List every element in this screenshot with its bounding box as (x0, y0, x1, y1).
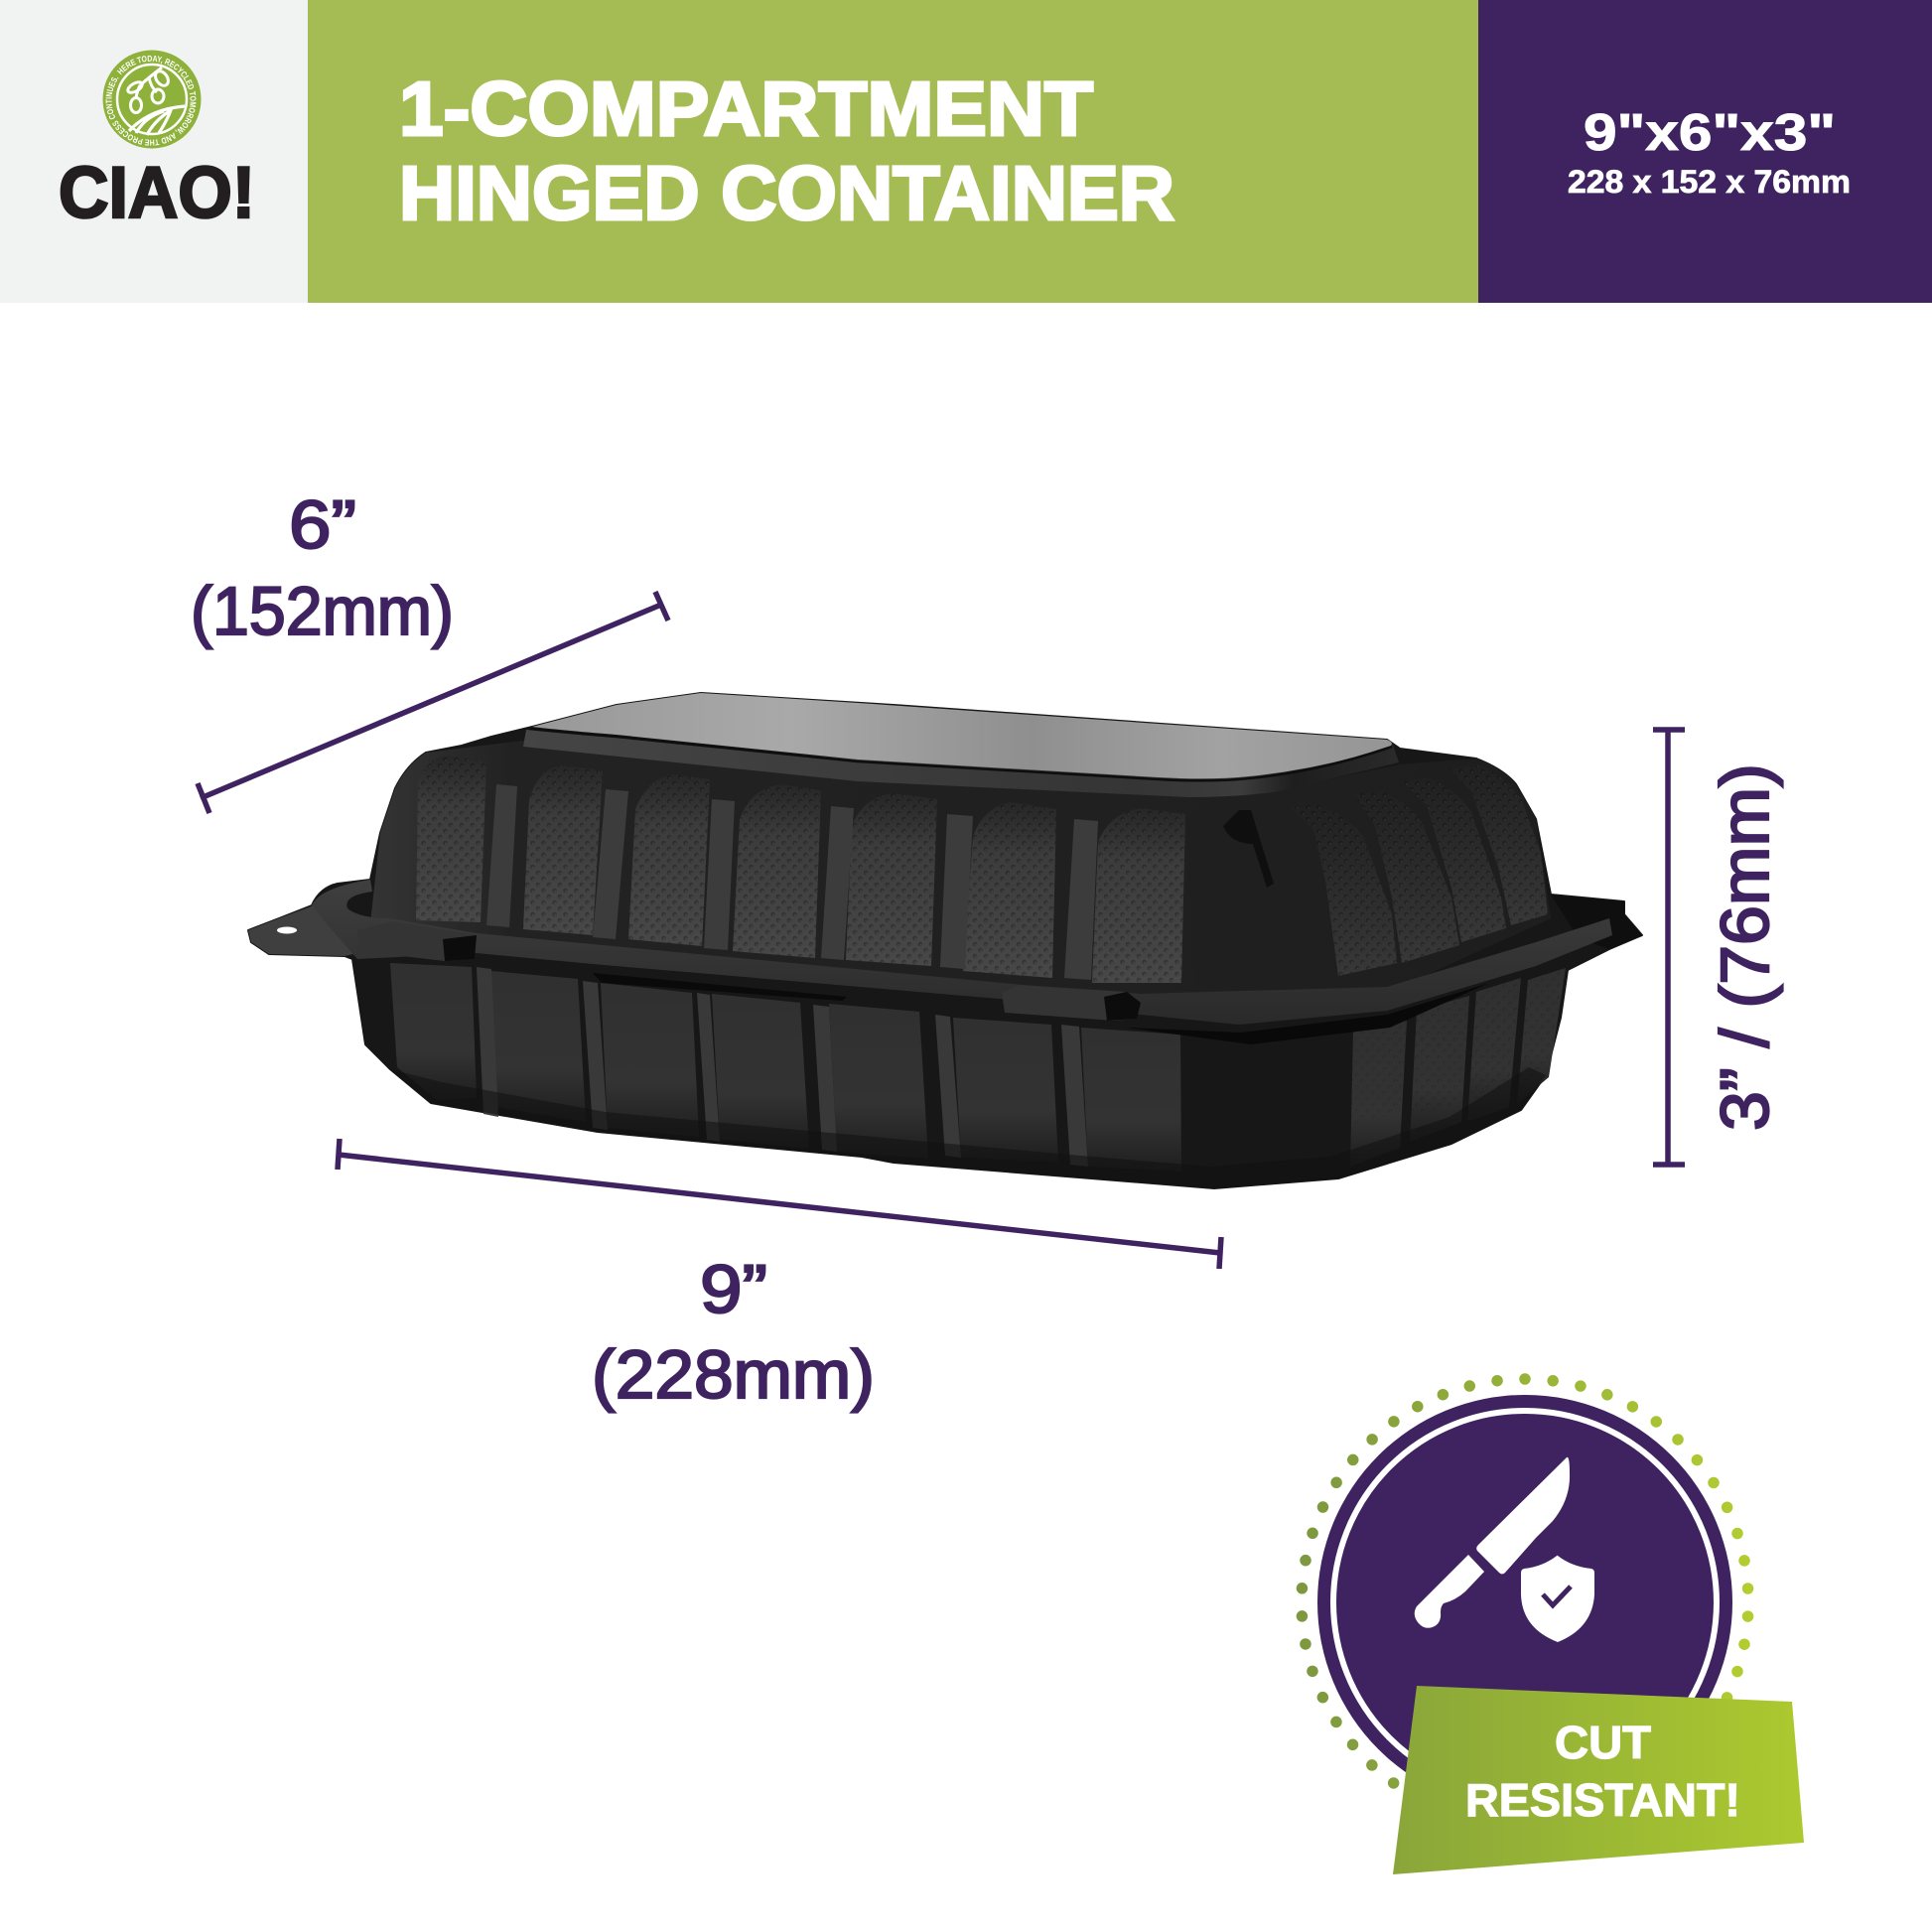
depth label (191, 486, 454, 649)
length label: (228mm) (592, 1336, 875, 1413)
ribbon text (1465, 1717, 1740, 1826)
right latch shadow (1104, 992, 1141, 1021)
left latch (357, 921, 477, 961)
lid dome (370, 740, 1551, 998)
lid ribs (486, 784, 1098, 980)
height arrow (1653, 729, 1685, 1166)
purple disc (1317, 1395, 1732, 1810)
tray shaded foot (390, 1067, 1546, 1188)
right latch (1002, 985, 1141, 1021)
dimension: depth 6 inch (191, 486, 668, 813)
rim slit (1126, 983, 1489, 1044)
depth arrow (198, 592, 668, 813)
tray dotted texture (1350, 968, 1566, 1127)
logo wordmark: CIAO! (59, 153, 255, 233)
logo emblem: HERE TODAY, RECYCLED TOMORROW, AND THE PROCESS CONTINUES. (105, 56, 197, 146)
ribbon text: CUT (1555, 1717, 1651, 1768)
title: 1-COMPARTMENT (399, 67, 1093, 152)
depth label: 6” (289, 486, 356, 563)
lid textured panels (416, 756, 1548, 983)
ribbon (1393, 1686, 1804, 1874)
left latch shadow (443, 935, 477, 961)
dimension: length 9 inch (338, 1139, 1221, 1413)
length arrow (338, 1139, 1221, 1269)
ribbon text: RESISTANT! (1465, 1774, 1740, 1826)
right tab (1551, 895, 1642, 949)
title: HINGED CONTAINER (399, 151, 1174, 236)
left tab (248, 905, 357, 956)
lid flat top band (523, 730, 1399, 797)
title (399, 67, 1174, 236)
length label: 9” (700, 1251, 767, 1327)
product photo: black hinged container (248, 693, 1642, 1188)
header: logo panel (0, 0, 308, 303)
lid flat top surface (532, 693, 1392, 778)
container silhouette (248, 693, 1642, 1188)
header: title panel (308, 0, 1478, 303)
length label (592, 1251, 875, 1413)
dotted ring (1302, 1379, 1748, 1826)
header: size panel (1478, 0, 1932, 303)
size in millimetres: 228 x 152 x 76mm (1568, 164, 1851, 200)
depth label: (152mm) (191, 573, 454, 649)
lid top edge line (530, 729, 1392, 780)
rim band (312, 880, 1612, 1025)
badge: cut resistant (1302, 1379, 1804, 1874)
icon: knife (1415, 1457, 1570, 1628)
tray textured panels (390, 963, 1566, 1172)
tab hole (277, 927, 297, 933)
size in inches: 9"x6"x3" (1584, 104, 1836, 162)
lid smooth corner (1185, 809, 1338, 983)
height label: 3” / (76mm) (1707, 763, 1783, 1131)
lid fold notch (1223, 810, 1274, 888)
icon: shield with check (1521, 1556, 1594, 1642)
tray ribs (477, 967, 1088, 1167)
front latch cut-out (593, 973, 847, 1001)
